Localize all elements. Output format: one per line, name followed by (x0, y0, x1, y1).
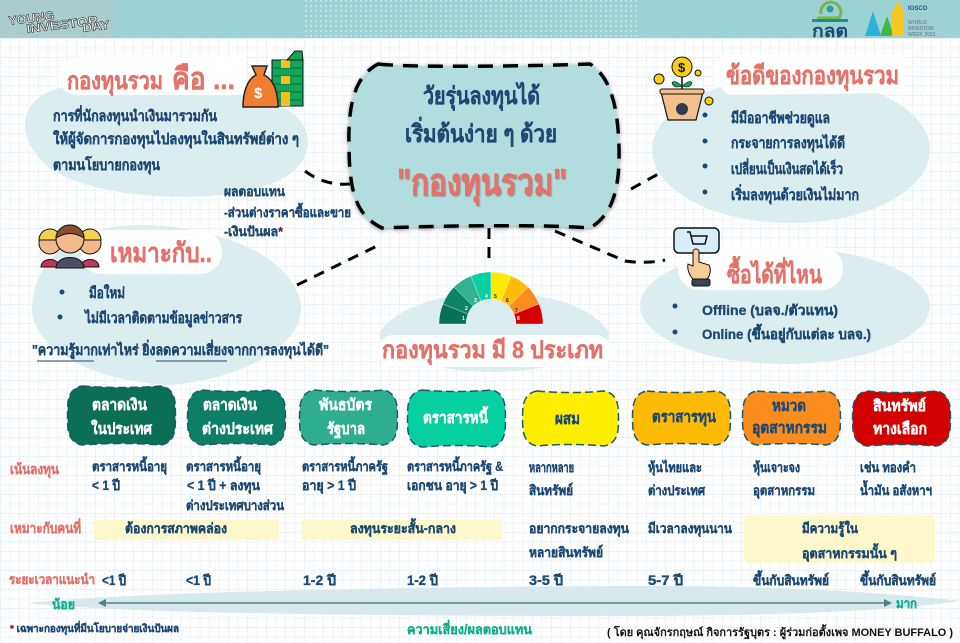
bullets: กระจายการลงทุนได้ดี (731, 133, 845, 153)
row: suitable for people who: อุตสาหกรรมนั้น ๆ (802, 543, 897, 562)
risk gauge: 2 (465, 306, 468, 312)
icon: coin plant (654, 57, 713, 120)
bullets: มือใหม่ (89, 284, 125, 302)
card: alternative: ทางเลือก (873, 420, 927, 438)
title lines (405, 81, 557, 148)
card: alternative: สินทรัพย์ (873, 397, 926, 415)
risk gauge: 3 (474, 298, 477, 304)
returns note: ผลตอบแทน (224, 184, 285, 199)
row: recommended holding period: 5-7 ปี (648, 573, 683, 588)
bullets (58, 284, 243, 328)
card: domestic money market (68, 386, 176, 445)
body text (53, 105, 299, 175)
logo: World Investor Week: WORLD (908, 20, 927, 26)
bullets: Offline (บลจ./ตัวแทน) (702, 302, 838, 318)
panel blob (32, 225, 301, 385)
panel: eight fund types (379, 272, 610, 372)
row: recommended holding period (9, 570, 936, 588)
risk gauge (439, 272, 543, 324)
row: suitable for people who: ลงทุนระยะสั้น-กลาง (350, 518, 456, 537)
row label: เน้นลงทุน (10, 461, 59, 478)
row: investment focus: เอกชน อายุ > 1 ปี (407, 478, 498, 494)
risk gauge: 4 (485, 294, 488, 300)
row: investment focus: น้ำมัน อสังหาฯ (860, 480, 932, 498)
logo: Young Investor Day: INVESTOR (26, 13, 99, 36)
body text: การที่นักลงทุนนำเงินมารวมกัน (53, 105, 218, 126)
risk return label: ความเสี่ยง/ผลตอบแทน (407, 619, 533, 637)
credit: ( โดย คุณจักรกฤษณ์ กิจการรัฐบุตร : ผู้ร่วมก่อตั้งเพจ MONEY BUFFALO ) (607, 624, 953, 640)
row: investment focus: < 1 ปี + ลงทุน (187, 478, 261, 494)
row: suitable for people who (10, 515, 935, 563)
connector dashes (297, 171, 665, 285)
card: fixed income: ตราสารหนี้ (423, 406, 488, 427)
quote: "ความรู้มากเท่าไหร่ ยิ่งลดความเสี่ยงจากการลงทุนได้ดี" (32, 339, 329, 359)
logo: SEC Thailand: กลต (812, 21, 848, 41)
bullets: มีมืออาชีพช่วยดูแล (731, 110, 830, 128)
heading: คือ ... (172, 63, 235, 96)
returns note (224, 184, 351, 239)
panel: suitable for (32, 225, 329, 385)
heading (67, 63, 235, 97)
panel: what is a mutual fund (25, 51, 308, 197)
row: recommended holding period: ขึ้นกับสินทรัพย์ (753, 570, 829, 588)
row: investment focus: สินทรัพย์ (529, 482, 573, 498)
header band (0, 0, 960, 38)
heading pill (58, 57, 245, 95)
bullets (702, 110, 859, 205)
icon: coin plant: $ (678, 60, 686, 75)
panel blob (652, 77, 930, 223)
row: suitable for people who: ต้องการสภาพคล่อง (125, 521, 227, 536)
row: investment focus: ตราสารหนี้อายุ (92, 456, 167, 475)
fund type cards (68, 386, 950, 447)
heading: ข้อดีของกองทุนรวม (726, 62, 899, 92)
row: investment focus (10, 456, 932, 513)
row: recommended holding period: ขึ้นกับสินทรัพย์ (860, 570, 936, 588)
card: equity (632, 391, 730, 445)
panel: center title (349, 64, 619, 228)
row: suitable for people who: มีความรู้ใน (802, 520, 859, 537)
row: investment focus: เช่น ทองคำ (860, 460, 916, 475)
card: domestic money market: ในประเทศ (91, 419, 153, 438)
title lines: เริ่มต้นง่าย ๆ ด้วย (405, 116, 557, 148)
icon: money bag and coins (243, 51, 303, 107)
logo: World Investor Week: WEEK 2021 (908, 32, 936, 38)
card: domestic money market: ตลาดเงิน (92, 396, 147, 414)
card: alternative (852, 391, 950, 446)
icon: money bag and coins: $ (254, 85, 263, 102)
title accent: "กองทุนรวม" (397, 162, 567, 206)
row: investment focus: อายุ > 1 ปี (302, 478, 356, 494)
risk gauge: 6 (506, 298, 509, 304)
card: foreign money market: ต่างประเทศ (202, 421, 274, 438)
row: recommended holding period: 1-2 ปี (407, 573, 438, 588)
card: mixed: ผสม (555, 411, 580, 428)
bullets: เปลี่ยนเป็นเงินสดได้เร็ว (731, 158, 843, 178)
body text: ให้ผู้จัดการกองทุนไปลงทุนในสินทรัพย์ต่าง ๆ (53, 129, 299, 149)
card: foreign money market: ตลาดเงิน (203, 396, 257, 414)
logo: Young Investor Day (0, 0, 114, 38)
risk gauge: 1 (462, 316, 465, 322)
title lines: วัยรุ่นลงทุนได้ (423, 81, 540, 112)
heading: กองทุนรวม มี 8 ประเภท (382, 337, 603, 366)
returns note: -ส่วนต่างราคาซื้อและขาย (224, 202, 351, 220)
risk gauge: 7 (515, 308, 518, 314)
row: suitable for people who: อยากกระจายลงทุน (529, 521, 630, 537)
center blob (349, 64, 619, 228)
icon: shopping cart button and hand (674, 228, 719, 286)
row: recommended holding period: 3-5 ปี (529, 573, 563, 588)
row: investment focus: หลากหลาย (529, 460, 574, 475)
risk arrow: น้อย (52, 597, 75, 612)
risk gauge: 8 (517, 316, 520, 322)
card: government bonds (300, 390, 398, 445)
card: sector (742, 391, 840, 445)
card: equity: ตราสารทุน (652, 409, 716, 427)
row: investment focus: หุ้นเจาะจง (753, 460, 800, 476)
risk arrow: มาก (896, 596, 917, 611)
row: investment focus: หุ้นไทยและ (648, 459, 702, 476)
card: government bonds: รัฐบาล (327, 421, 365, 439)
heading: ซื้อได้ที่ไหน (727, 255, 822, 289)
icon: three people (39, 225, 101, 268)
logo: World Investor Week (865, 1, 936, 38)
row: suitable for people who: มีเวลาลงทุนนาน (648, 521, 733, 537)
card: sector: หมวด (772, 398, 806, 415)
logo: World Investor Week: INVESTOR (908, 26, 934, 32)
heading pill (678, 247, 843, 290)
footnote: * เฉพาะกองทุนที่มีนโยบายจ่ายเงินปันผล (10, 620, 179, 636)
row: investment focus: ต่างประเทศบางส่วน (186, 498, 285, 513)
row: recommended holding period: <1 ปี (102, 573, 126, 588)
panel blob (380, 292, 609, 372)
risk arrow (27, 586, 960, 616)
card: mixed (522, 391, 618, 446)
heading: กองทุนรวม (67, 68, 163, 97)
bullets (672, 302, 871, 343)
panel blob (640, 248, 930, 364)
card: sector: อุตสาหกรรม (752, 420, 827, 438)
panel blob (25, 86, 308, 197)
panel: advantages (652, 55, 930, 223)
body text: ตามนโยบายกองทุน (53, 155, 161, 175)
card: fixed income (408, 390, 506, 447)
row: investment focus: ตราสารหนี้อายุ (186, 456, 261, 475)
bullets: Online (ขึ้นอยู่กับแต่ละ บลจ.) (702, 323, 871, 343)
heading: เหมาะกับ.. (110, 238, 212, 268)
bullets: เริ่มลงทุนด้วยเงินไม่มาก (731, 184, 859, 205)
card: foreign money market (188, 390, 286, 445)
row: investment focus: ต่างประเทศ (648, 483, 705, 498)
row: recommended holding period: 1-2 ปี (303, 573, 336, 588)
row: investment focus: < 1 ปี (92, 478, 120, 493)
row: suitable for people who: หลายสินทรัพย์ (529, 544, 603, 560)
logo: World Investor Week: IOSCO (908, 6, 928, 12)
row label: ระยะเวลาแนะนำ (9, 572, 95, 587)
heading pill (80, 230, 222, 274)
bullets: ไม่มีเวลาติดตามข้อมูลข่าวสาร (83, 308, 243, 328)
row: investment focus: ตราสารหนี้ภาครัฐ (302, 456, 388, 476)
heading pill (715, 55, 905, 95)
logo: Young Investor Day: DAY (82, 18, 110, 35)
row label: เหมาะกับคนที่ (10, 518, 81, 536)
card: government bonds: พันธบัตร (319, 397, 373, 414)
logo: Young Investor Day: YOUNG (8, 8, 55, 28)
heading pill (379, 335, 610, 367)
risk gauge: 5 (494, 294, 497, 300)
row: investment focus: อุตสาหกรรม (753, 483, 815, 499)
row: recommended holding period: <1 ปี (186, 573, 211, 588)
panel: where to buy (640, 228, 930, 364)
returns note: -เงินปันผล* (224, 224, 284, 239)
logo: SEC Thailand (812, 2, 848, 41)
row: investment focus: ตราสารหนี้ภาครัฐ & (407, 456, 503, 476)
